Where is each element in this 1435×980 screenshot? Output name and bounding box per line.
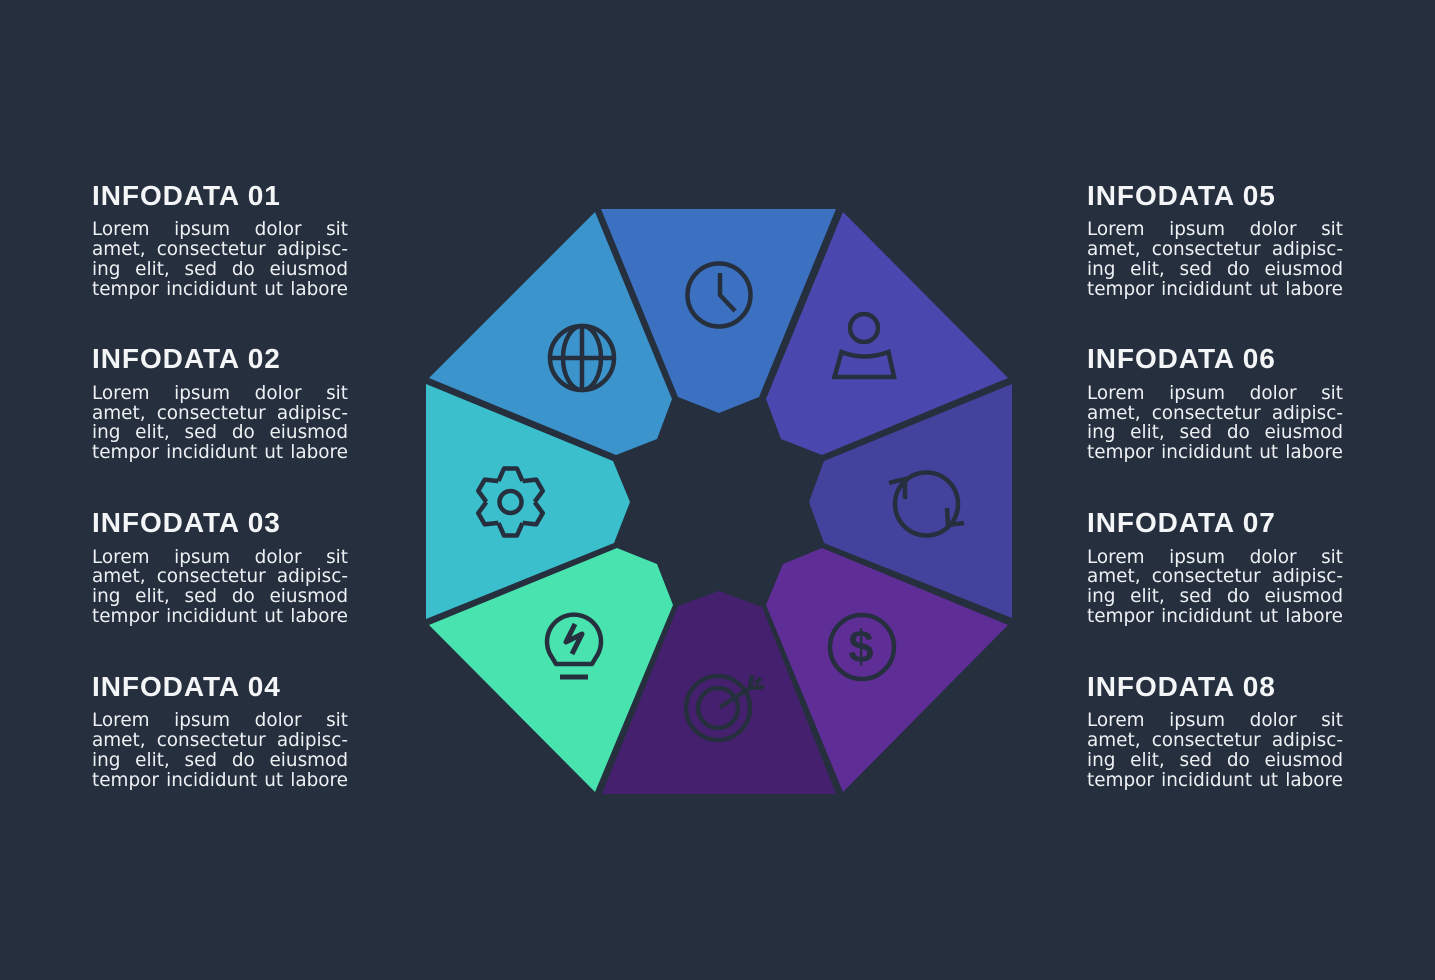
icon: person [834,314,894,377]
text block: infodata 02: INFODATA 02 [92,343,281,374]
text block: infodata 08: tempor incididunt ut labore [1087,770,1343,790]
segment: globe [429,212,672,455]
text block: infodata 03 [92,507,348,627]
text block: infodata 05 [1087,180,1343,300]
icon: target [686,675,764,740]
segment: dollar [766,548,1008,792]
text block: infodata 01: Lorem ipsum dolor sit [92,219,348,240]
text block: infodata 07: INFODATA 07 [1087,507,1276,538]
text block: infodata 06: INFODATA 06 [1087,343,1276,374]
text block: infodata 05: Lorem ipsum dolor sit [1087,219,1343,240]
text block: infodata 07: ing elit, sed do eiusmod [1087,586,1343,607]
text block: infodata 04: ing elit, sed do eiusmod [92,750,348,771]
text block: infodata 03: ing elit, sed do eiusmod [92,586,348,607]
text block: infodata 05: tempor incididunt ut labore [1087,278,1343,300]
text block: infodata 07 [1087,507,1343,627]
text block: infodata 08: ing elit, sed do eiusmod [1087,750,1343,771]
text block: infodata 07: amet, consectetur adipisc- [1087,566,1343,587]
text block: infodata 02 [92,343,348,463]
segment: target [602,591,836,794]
segment: person [766,212,1008,455]
text block: infodata 04: amet, consectetur adipisc- [92,730,348,751]
icon: globe [550,326,614,390]
text block: infodata 06: Lorem ipsum dolor sit [1087,383,1343,404]
text block: infodata 04: INFODATA 04 [92,670,281,702]
text block: infodata 06 [1087,343,1343,463]
icon: dollar [830,615,894,679]
text block: infodata 08: INFODATA 08 [1087,670,1276,702]
text block: infodata 07: Lorem ipsum dolor sit [1087,547,1343,568]
text block: infodata 03: amet, consectetur adipisc- [92,566,348,587]
text block: infodata 08: amet, consectetur adipisc- [1087,730,1343,751]
icon: light bulb [547,615,601,677]
segment: gear [426,384,630,619]
text block: infodata 01: tempor incididunt ut labore [92,278,348,300]
text block: infodata 02: Lorem ipsum dolor sit [92,383,348,404]
text block: infodata 02: amet, consectetur adipisc- [92,403,348,424]
icon: clock [688,264,750,326]
icon: refresh [889,472,964,536]
text block: infodata 06: amet, consectetur adipisc- [1087,403,1343,424]
text block: infodata 05: INFODATA 05 [1087,180,1276,210]
text block: infodata 08: Lorem ipsum dolor sit [1087,710,1343,731]
segment: clock [601,209,836,413]
text block: infodata 08 [1087,670,1343,790]
text block: infodata 02: tempor incididunt ut labore [92,442,348,463]
text block: infodata 01: INFODATA 01 [92,180,281,210]
segment: dollar: $ [848,621,874,672]
segment: light bulb [429,548,673,792]
text block: infodata 05: ing elit, sed do eiusmod [1087,259,1343,280]
text block: infodata 05: amet, consectetur adipisc- [1087,239,1343,260]
text block: infodata 03: INFODATA 03 [92,507,281,538]
segment: refresh [809,384,1012,618]
text block: infodata 06: ing elit, sed do eiusmod [1087,422,1343,443]
text block: infodata 04: Lorem ipsum dolor sit [92,710,348,731]
text block: infodata 01 [92,180,348,300]
text block: infodata 01: amet, consectetur adipisc- [92,239,348,260]
text block: infodata 06: tempor incididunt ut labore [1087,442,1343,463]
text block: infodata 04 [92,670,348,790]
icon: gear [475,468,546,536]
text block: infodata 04: tempor incididunt ut labore [92,770,348,790]
text block: infodata 01: ing elit, sed do eiusmod [92,259,348,280]
text block: infodata 03: Lorem ipsum dolor sit [92,547,348,568]
text block: infodata 02: ing elit, sed do eiusmod [92,422,348,443]
text block: infodata 03: tempor incididunt ut labore [92,606,348,627]
text block: infodata 07: tempor incididunt ut labore [1087,606,1343,627]
